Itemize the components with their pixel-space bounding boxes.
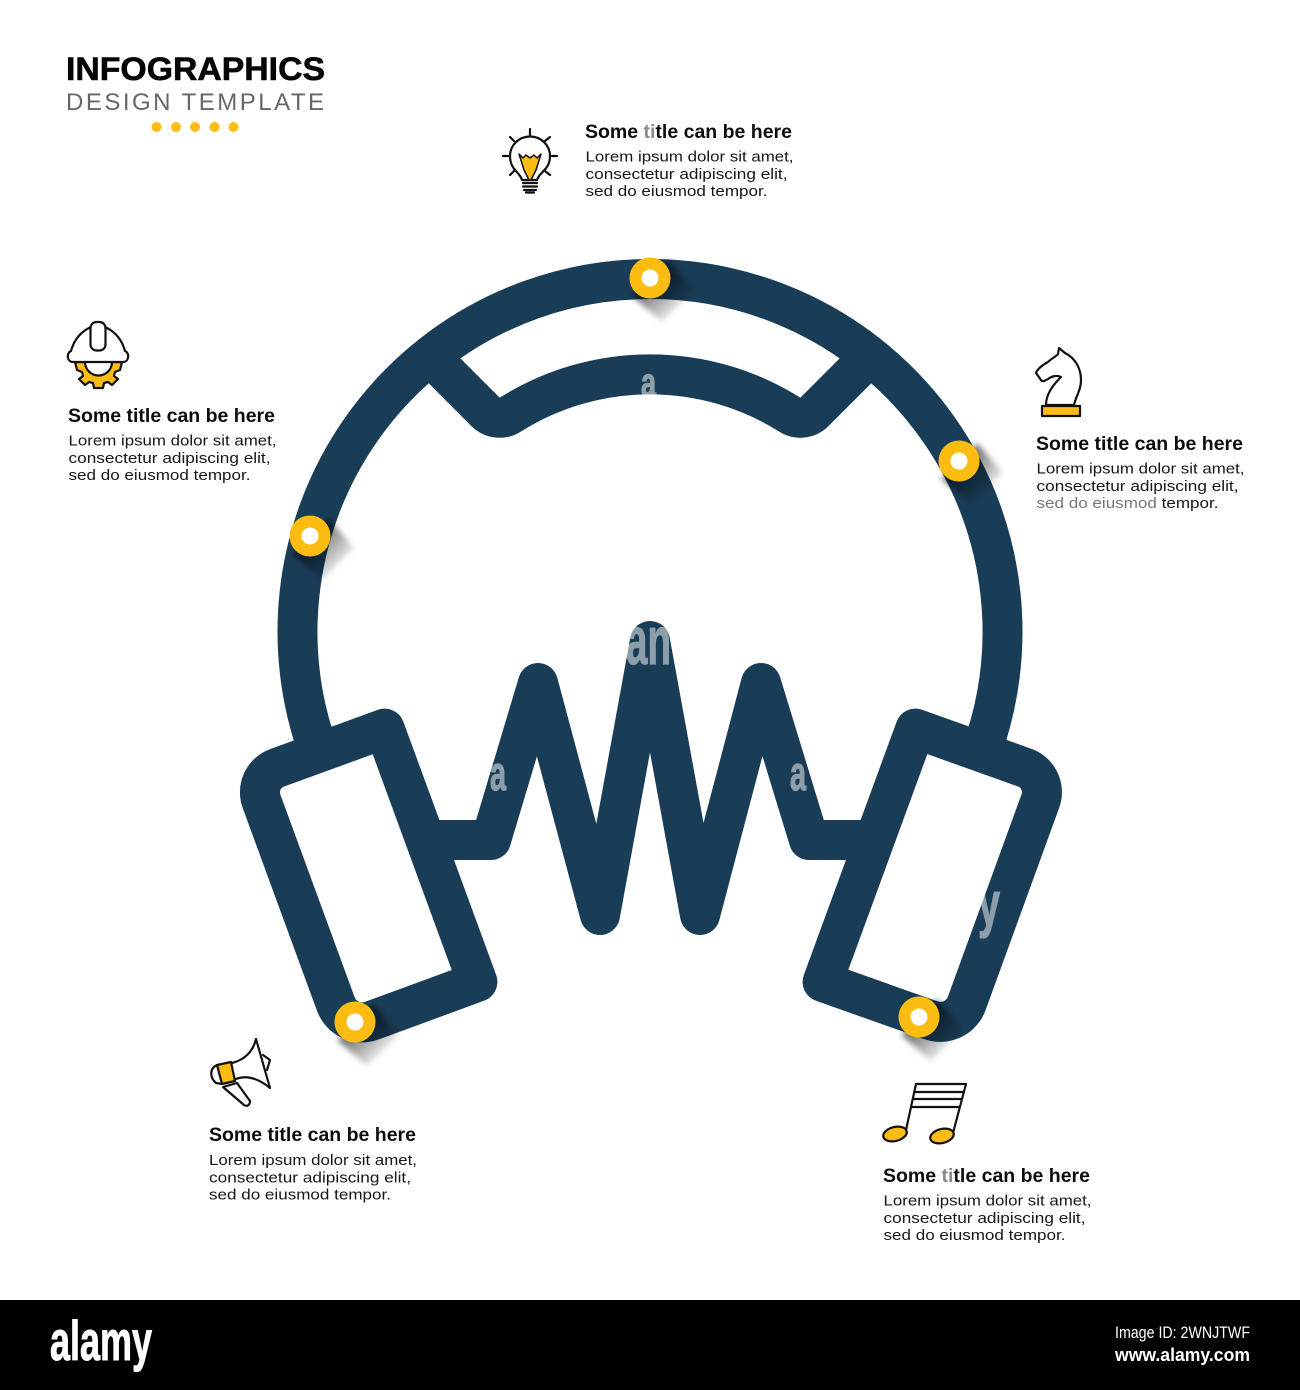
description: consectetur adipiscing elit, xyxy=(586,166,788,183)
text block: left xyxy=(68,406,276,484)
text block: bottom left xyxy=(209,1125,417,1204)
marker: left xyxy=(290,516,354,580)
icon: chess knight xyxy=(1036,348,1081,416)
title: Some title can be here xyxy=(585,122,792,143)
description: consectetur adipiscing elit, xyxy=(68,450,270,467)
heading: infographics: INFOGRAPHICS xyxy=(66,51,325,87)
image id: Image ID: 2WNJTWF xyxy=(1115,1323,1250,1342)
subheading: design template: DESIGN TEMPLATE xyxy=(66,89,324,116)
text block: right xyxy=(1036,434,1244,512)
description: consectetur adipiscing elit, xyxy=(1036,478,1238,495)
icon: megaphone xyxy=(211,1039,270,1106)
watermark fragments on headphones: a xyxy=(790,748,806,801)
description xyxy=(884,1192,1092,1244)
description xyxy=(68,432,276,484)
left ear cup xyxy=(260,729,477,1022)
description: sed do eiusmod tempor. xyxy=(209,1186,391,1204)
description: Lorem ipsum dolor sit amet, xyxy=(586,148,794,166)
footer logo: alamy xyxy=(50,1309,152,1372)
headphones illustration xyxy=(260,279,1042,1022)
watermark fragments on headphones: a xyxy=(490,748,506,801)
icon: hard hat and gear xyxy=(68,322,128,388)
description: Lorem ipsum dolor sit amet, xyxy=(1036,460,1244,478)
description: consectetur adipiscing elit, xyxy=(884,1210,1086,1227)
description: sed do eiusmod tempor. xyxy=(68,467,250,484)
watermark fragments on headphones xyxy=(490,361,1000,939)
description xyxy=(586,148,794,200)
website: www.alamy.com xyxy=(1114,1345,1250,1365)
title: Some title can be here xyxy=(1036,434,1243,455)
description: sed do eiusmod tempor. xyxy=(586,183,768,200)
headband arc xyxy=(297,279,1002,750)
title: Some title can be here xyxy=(883,1166,1090,1187)
text block: top xyxy=(585,122,794,200)
inner headband pad xyxy=(430,356,870,418)
watermark fragments on headphones: a xyxy=(641,361,657,405)
description: sed do eiusmod tempor. xyxy=(1036,495,1218,512)
marker: bottom right xyxy=(898,996,963,1061)
title block xyxy=(66,51,325,132)
text block: bottom right xyxy=(883,1166,1092,1244)
title: Some title can be here xyxy=(68,406,275,427)
marker: top xyxy=(630,258,694,322)
heading dots xyxy=(152,122,238,132)
title: Some title can be here xyxy=(209,1125,416,1146)
watermark fragments on headphones: y xyxy=(978,870,1000,939)
description: Lorem ipsum dolor sit amet, xyxy=(68,432,276,450)
marker: right xyxy=(938,440,1003,505)
sound wave xyxy=(425,641,875,915)
description xyxy=(209,1152,417,1204)
description: Lorem ipsum dolor sit amet, xyxy=(209,1152,417,1169)
description: Lorem ipsum dolor sit amet, xyxy=(884,1192,1092,1210)
right ear cup xyxy=(823,729,1042,1022)
description xyxy=(1036,460,1244,512)
footer bar xyxy=(0,1300,1300,1390)
icon: light bulb xyxy=(503,129,557,192)
description: consectetur adipiscing elit, xyxy=(209,1170,411,1186)
marker: bottom left xyxy=(334,1002,399,1066)
watermark fragments on headphones: an xyxy=(626,603,671,679)
icon: music notes xyxy=(882,1084,966,1146)
description: sed do eiusmod tempor. xyxy=(884,1227,1066,1244)
